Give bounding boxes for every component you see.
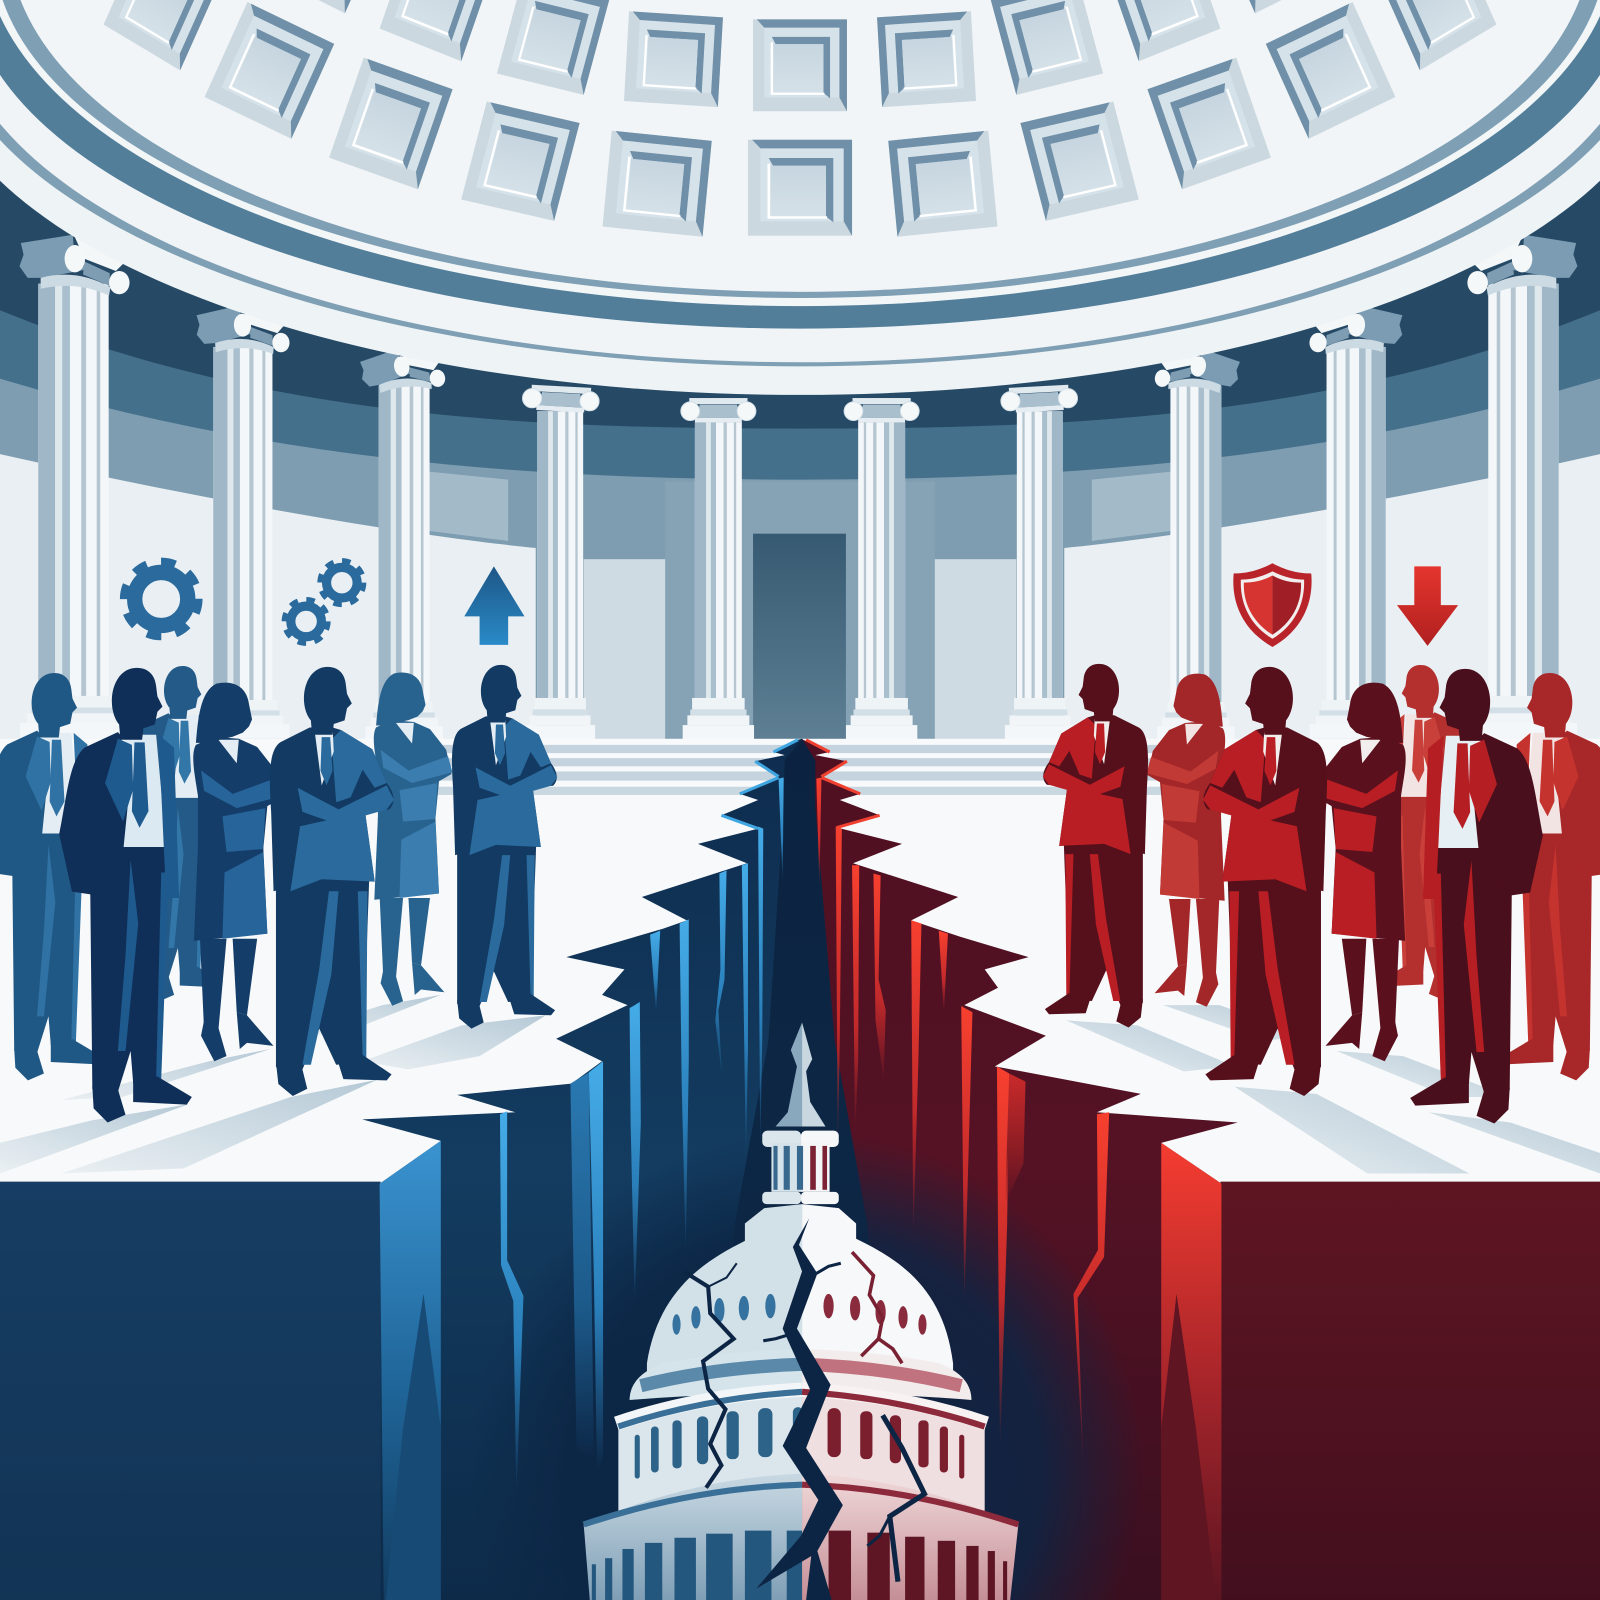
icon: shield (1233, 563, 1312, 647)
floor and steps (0, 739, 1600, 1186)
dome coffers (104, 0, 1496, 237)
central doorway (753, 534, 846, 743)
capitol cracks (684, 1218, 924, 1600)
figure: blue man near crack (452, 665, 557, 1029)
capitol ring (630, 1349, 971, 1400)
figure: red man near crack (1043, 664, 1148, 1028)
blue crack facets (500, 778, 784, 1497)
red medium facet (1005, 1073, 1026, 1204)
figure: blue man back (125, 666, 223, 1001)
icon: large gear (124, 562, 198, 636)
figure: blue woman back (374, 673, 452, 1006)
background wall (0, 0, 1600, 816)
left block (0, 1141, 441, 1600)
figure: red woman back (1147, 674, 1225, 1007)
figure: red man crossed arms (1203, 667, 1327, 1096)
figure: red man right (1501, 673, 1600, 1080)
figure: red woman front (1316, 683, 1406, 1061)
chasm (362, 739, 1238, 1600)
figure: blue man left (0, 673, 103, 1080)
capitol window tier (616, 1388, 987, 1512)
blue medium facet (570, 1072, 594, 1459)
columns right (844, 235, 1577, 741)
capitol lantern (776, 1022, 826, 1127)
capitol lower tier (584, 1473, 1018, 1600)
figure: blue woman front (193, 683, 283, 1061)
blue crack edges (721, 740, 798, 829)
capitol colonnade (762, 1131, 839, 1204)
icon: up arrow (464, 566, 524, 645)
red group (1043, 664, 1600, 1123)
red crack facets (816, 778, 1109, 1469)
figure: red man back (1380, 665, 1478, 1000)
icon: down arrow (1397, 566, 1458, 646)
red crack edges (806, 740, 880, 828)
figure: blue man front dark (59, 668, 192, 1122)
floor shadows (0, 995, 1600, 1173)
capitol dome (647, 1204, 953, 1372)
icon: gear pair (285, 561, 363, 643)
columns left (19, 235, 756, 741)
blue group (0, 665, 557, 1122)
figure: red man front dark (1410, 669, 1543, 1123)
figure: blue man crossed arms (270, 667, 394, 1096)
dome with entablature bands (0, 0, 1600, 395)
capitol building (584, 1022, 1018, 1600)
right block (1161, 1143, 1600, 1600)
